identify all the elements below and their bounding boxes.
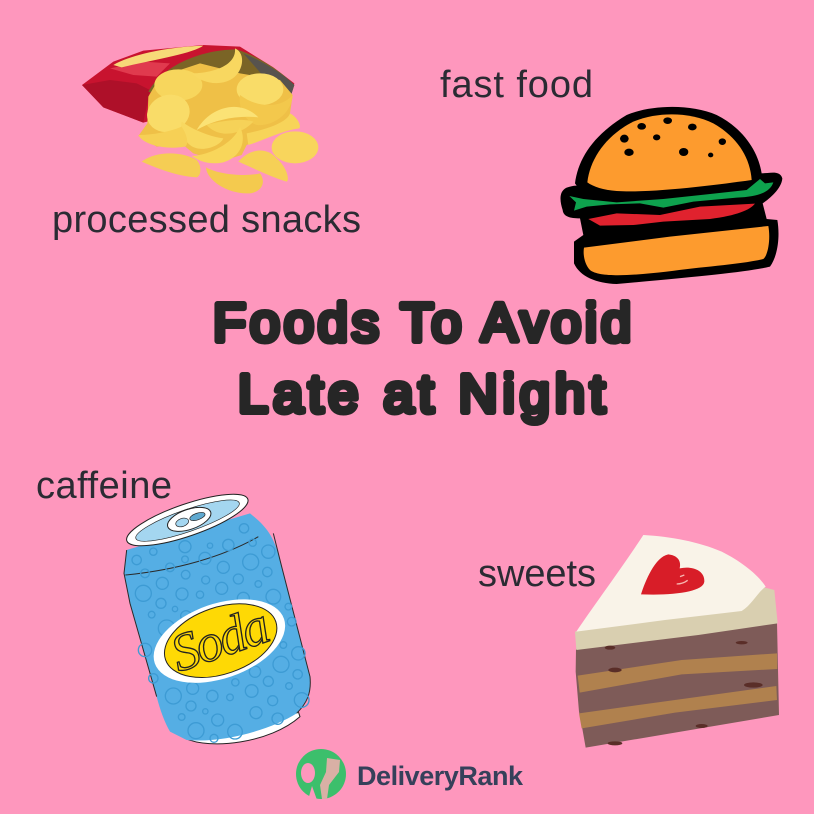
can label (143, 584, 296, 699)
title: Late at Night (238, 364, 605, 424)
can label: Soda (163, 594, 277, 683)
title (213, 293, 631, 424)
can lid (122, 484, 253, 556)
icon: soda can (122, 484, 310, 744)
icon: cake slice (575, 535, 779, 748)
title: Foods To Avoid (213, 293, 631, 353)
label: caffeine: caffeine (36, 465, 172, 507)
logo wordmark: DeliveryRank (357, 761, 524, 791)
icon: logo spoon and fork (296, 749, 346, 800)
label: sweets: sweets (478, 553, 596, 595)
label: fast food: fast food (440, 64, 593, 106)
label: processed snacks: processed snacks (52, 199, 361, 241)
can bubbles (132, 524, 309, 742)
icon: burger (560, 107, 782, 284)
icon: bag of chips (82, 45, 318, 193)
chips pile base (138, 63, 300, 162)
logo: DeliveryRank (296, 749, 524, 800)
